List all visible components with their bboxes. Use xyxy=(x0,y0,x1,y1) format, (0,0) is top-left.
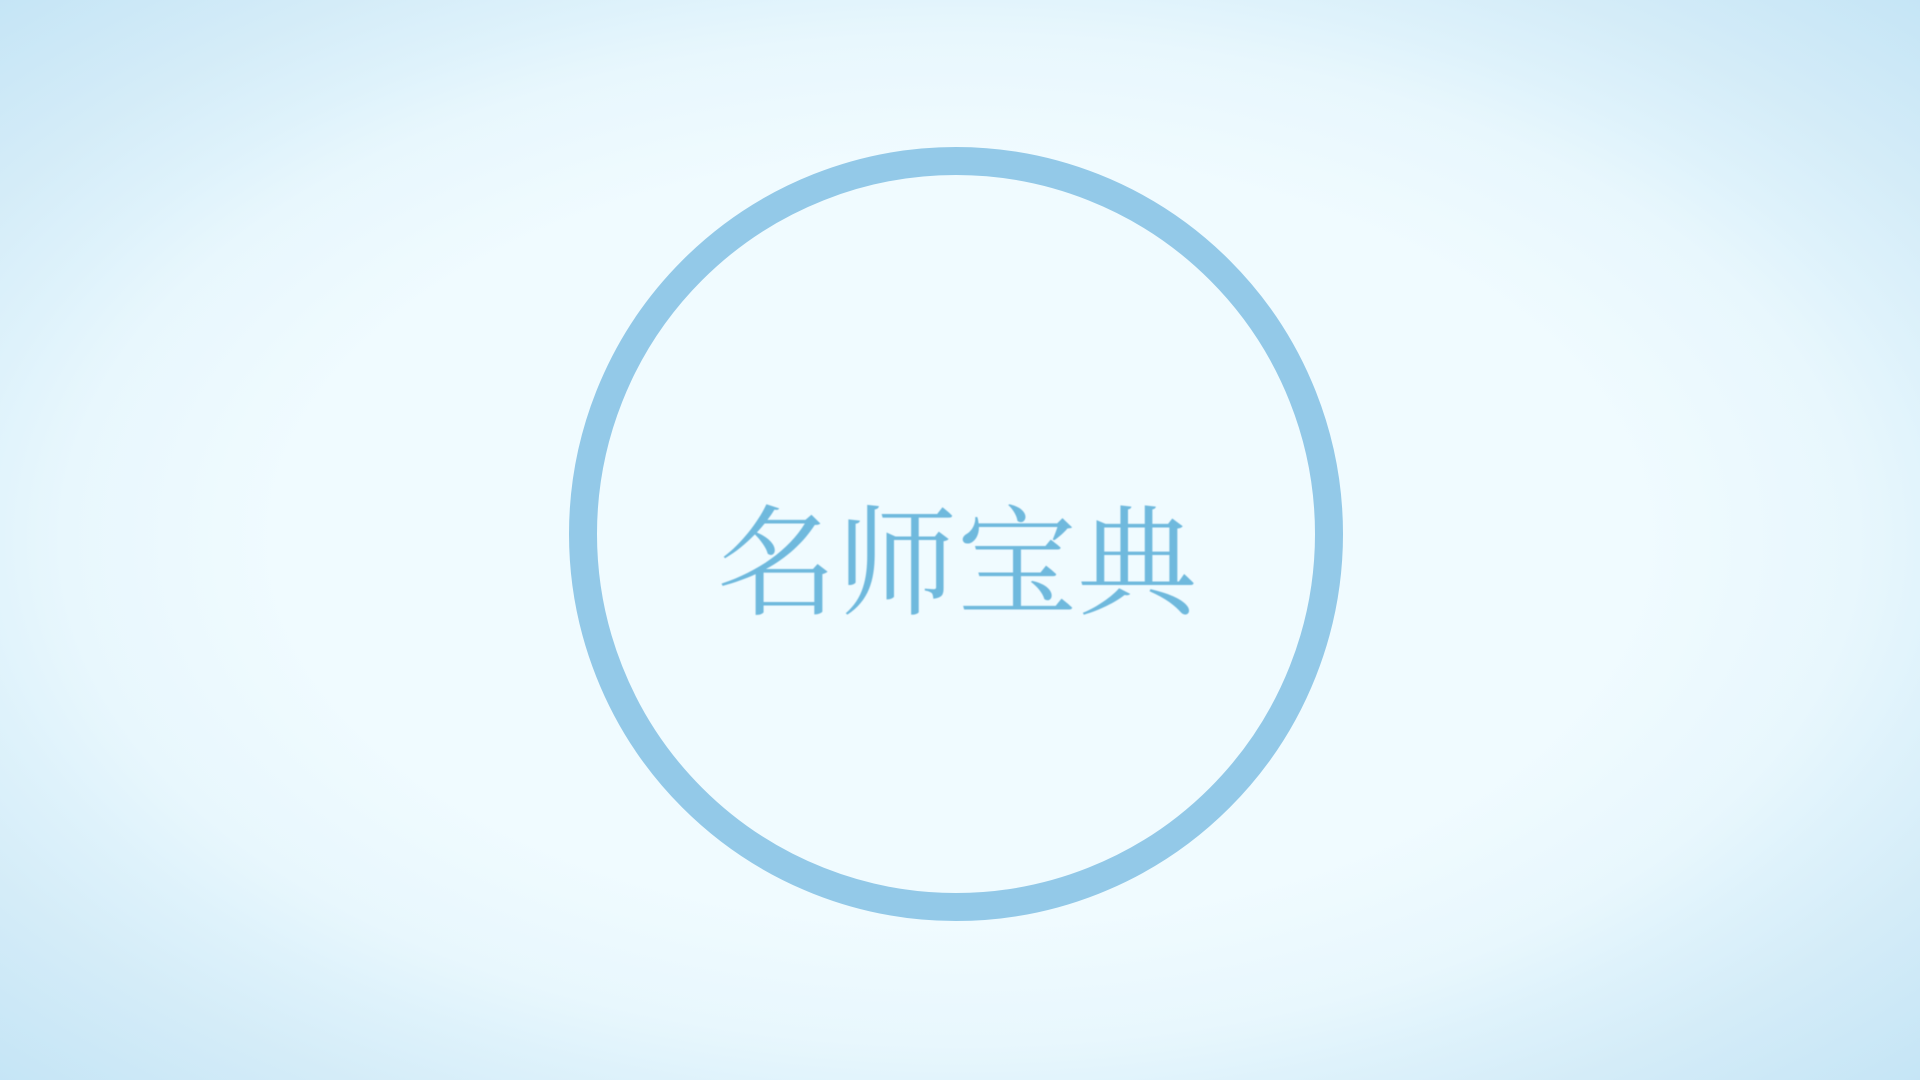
ring circle xyxy=(569,147,1343,921)
title: 名师宝典 xyxy=(717,498,1197,631)
